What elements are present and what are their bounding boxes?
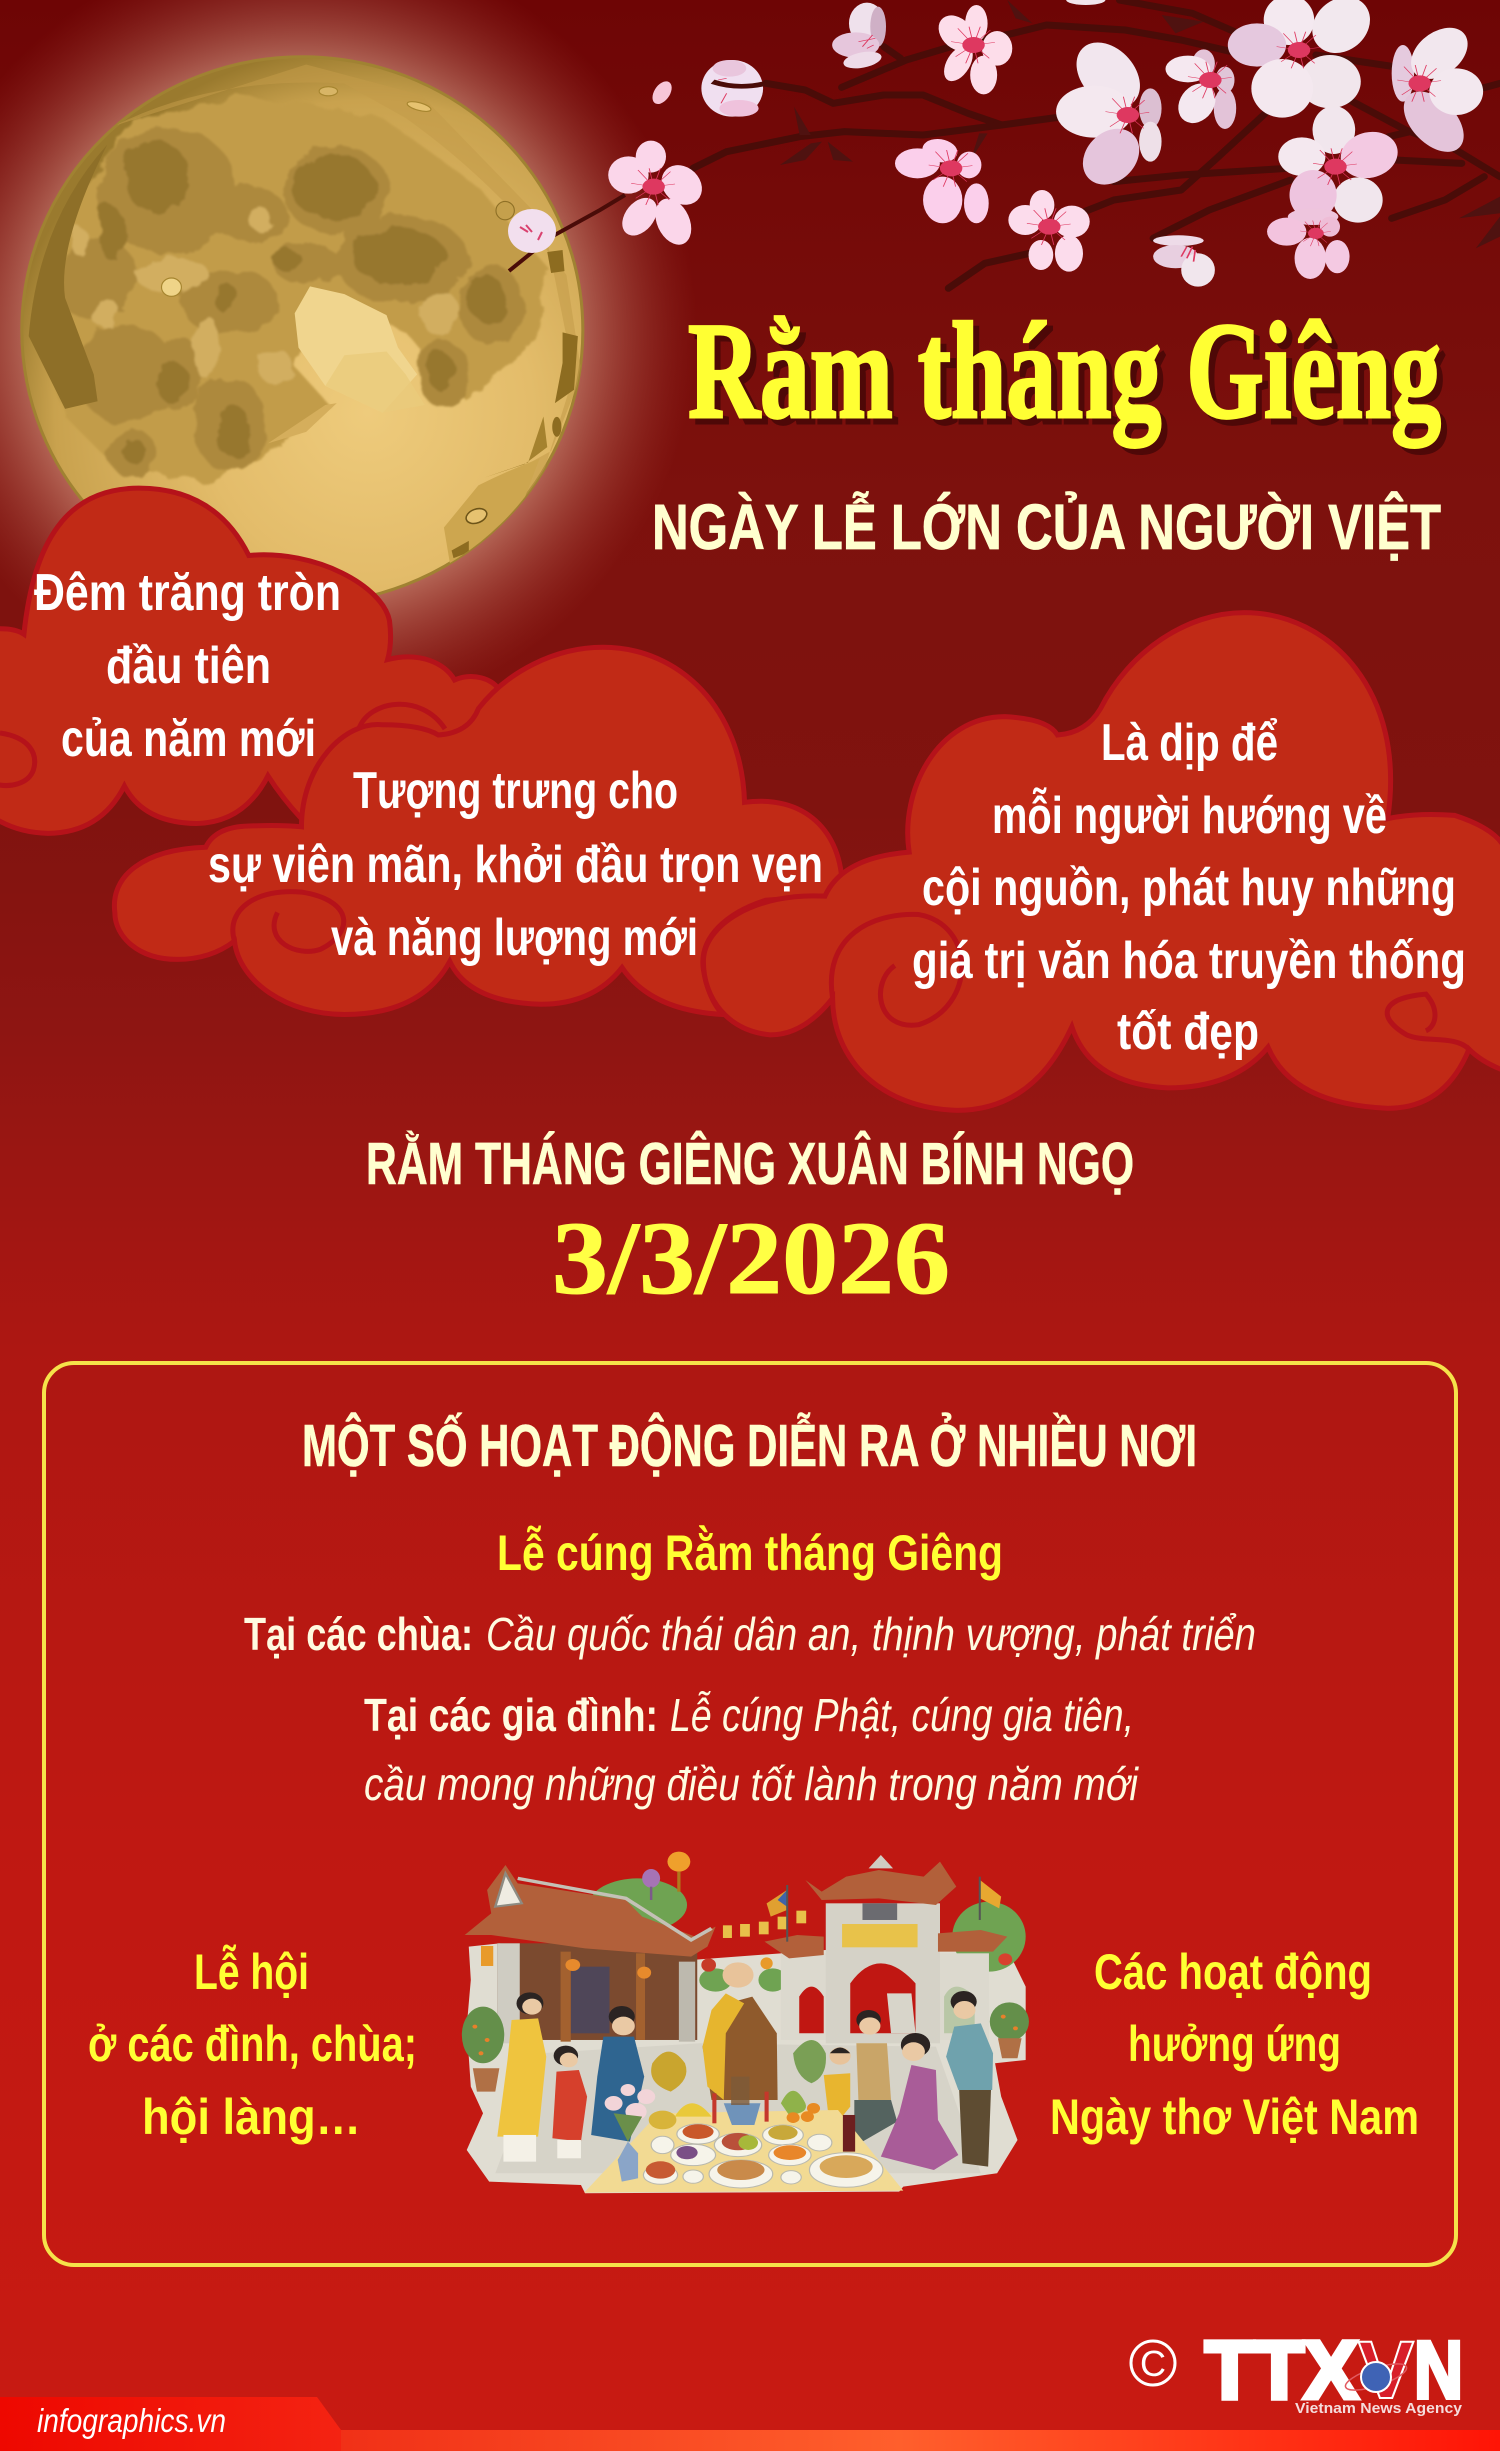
date heading: RẰM THÁNG GIÊNG XUÂN BÍNH NGỌ [366,1130,1134,1197]
celebration text: hưởng ứng [1128,2016,1341,2072]
copyright icon [1131,2341,1175,2385]
festival text [88,1944,417,2145]
ritual heading: Lễ cúng Rằm tháng Giêng [497,1525,1003,1581]
panel: activities [44,1363,1456,2265]
cloud text: first: đầu tiên [106,637,271,695]
celebration text: Các hoạt động [1094,1944,1372,2000]
cloud: middle [114,647,842,1014]
cloud text: second: sự viên mãn, khởi đầu trọn vẹn [208,836,823,894]
cloud text: third: mỗi người hướng về [992,787,1387,845]
cloud text: first [34,564,341,768]
flowers [608,0,1483,287]
worshippers left [497,1992,644,2162]
cloud text: first: Đêm trăng tròn [34,564,341,622]
branches [693,0,1500,288]
cloud: right [703,613,1500,1110]
flower group [608,0,1483,287]
cloud text: second [208,762,823,967]
potted trees [462,2002,1029,2092]
footer bar [0,2430,1500,2451]
logo: TTXVN: V [1358,2325,1414,2416]
cloud text: third: tốt đẹp [1117,1003,1259,1061]
festival text: hội làng… [142,2089,361,2145]
festival text: Lễ hội [194,1944,309,2000]
cloud: left [0,488,498,833]
moon [0,0,675,669]
temple text [244,1608,1256,1660]
cloud text: first: của năm mới [61,710,316,768]
logo: TTXVN: Vietnam News Agency [1295,2400,1463,2417]
family text: cầu mong những điều tốt lành trong năm mới [364,1758,1139,1810]
celebration text [1050,1944,1419,2145]
footer tab [0,2397,341,2451]
logo: TTXVN: N [1414,2325,1463,2416]
festival text: ở các đình, chùa; [88,2016,417,2072]
date: 3/3/2026 [552,1201,950,1316]
stem and bud over moon [508,195,625,271]
hall building [465,1865,716,2043]
temple text: Cầu quốc thái dân an, thịnh vượng, phát triển [486,1608,1256,1660]
gate building [765,1855,1007,2043]
cloud text: third: Là dịp để [1101,714,1278,772]
family text [364,1689,1139,1810]
illustration: temple ceremony [462,1852,1029,2193]
celebration text: Ngày thơ Việt Nam [1050,2089,1419,2145]
cloud text: second: và năng lượng mới [331,909,698,967]
cloud text: third [912,714,1466,1061]
family text: Lễ cúng Phật, cúng gia tiên, [670,1689,1134,1741]
trees behind [589,1878,1026,1992]
courtyard [495,2043,981,2173]
ground [467,1937,1026,2193]
monk [703,1962,778,2100]
worshippers right [824,1991,993,2170]
source text: infographics.vn [37,2402,226,2439]
cloud text: second: Tượng trưng cho [353,762,678,820]
copyright icon: C [1140,2343,1166,2384]
lanterns and flags [481,1852,1012,1979]
logo: TTXVN: TTX [1205,2325,1358,2416]
logo: TTXVN [1205,2325,1463,2417]
blossom branch [508,0,1500,288]
offering table [584,2040,903,2193]
temple text: Tại các chùa: [244,1608,473,1660]
family text: Tại các gia đình: [364,1689,658,1741]
